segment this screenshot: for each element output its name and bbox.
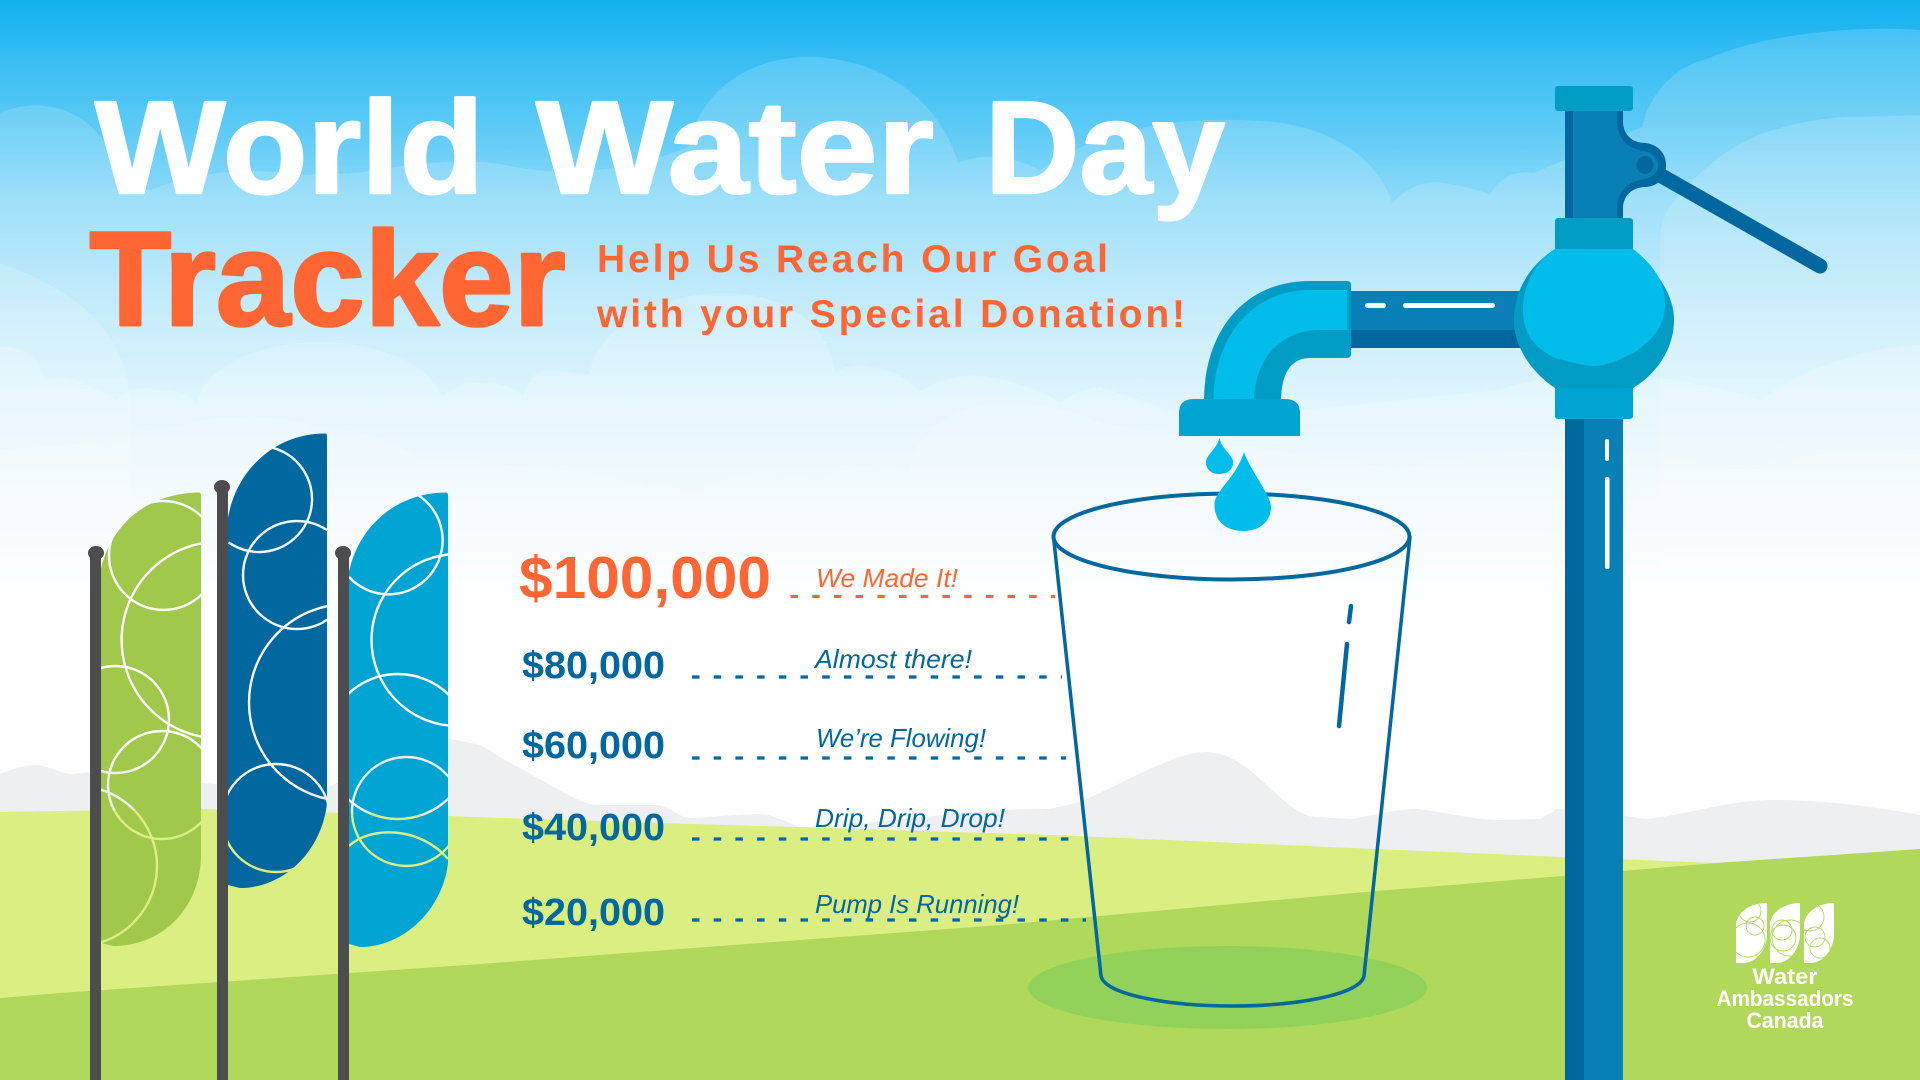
logo text: Canada — [1746, 1008, 1824, 1033]
title: World Water Day: World — [95, 74, 484, 221]
title: Tracker: Tracker — [90, 205, 566, 354]
label: We're Flowing: We’re Flowing! — [816, 723, 986, 753]
cloud layer: upper band — [0, 29, 1920, 620]
milestone labels — [813, 563, 1019, 919]
foreground green field — [0, 849, 1920, 1080]
amount: 20,000: $20,000 — [522, 892, 665, 934]
cloud layer: lower band — [0, 293, 1920, 640]
subtitle line 1: Help Us Reach Our Goal — [597, 238, 1108, 281]
glass highlight short — [1349, 606, 1351, 622]
title: World Water Day: Water — [536, 74, 934, 221]
glass — [1054, 494, 1410, 1006]
glass highlight long — [1339, 644, 1347, 726]
label: Drip Drip Drop: Drip, Drip, Drop! — [815, 803, 1005, 833]
logo: Water Ambassadors Canada — [1716, 900, 1854, 1033]
logo flags — [1731, 900, 1834, 963]
amount: 100,000: $100,000 — [519, 545, 771, 611]
flag pole: navy — [214, 480, 230, 1080]
flag pole: green — [88, 546, 104, 1080]
glass shadow — [1028, 946, 1427, 1029]
pump column — [1565, 415, 1623, 1080]
donation amounts — [519, 545, 771, 934]
water pump — [1179, 86, 1820, 1080]
large water drop — [1214, 452, 1271, 531]
logo text: Ambassadors — [1716, 986, 1854, 1011]
tracker dashed lines — [692, 596, 1086, 920]
elbow pipe — [1204, 281, 1351, 402]
glass body — [1054, 537, 1410, 1006]
lower collar — [1555, 385, 1633, 419]
pivot bolt — [1636, 156, 1654, 174]
logo text: Water — [1752, 964, 1818, 989]
cloud layer: right inner cloud — [1660, 115, 1920, 620]
pump head outer — [1565, 105, 1666, 225]
cloud layer: left large cloud — [0, 263, 130, 620]
horizontal spout pipe — [1345, 291, 1525, 348]
faucet nozzle — [1179, 399, 1300, 436]
pump handle — [1660, 175, 1820, 266]
top cap — [1555, 86, 1633, 111]
cloud layer: faint bottom band — [0, 403, 1920, 640]
label: Almost there: Almost there! — [813, 644, 972, 674]
pale green field — [0, 809, 1920, 1080]
label: We Made It: We Made It! — [816, 563, 958, 593]
flag: green — [101, 492, 201, 946]
amount: 60,000: $60,000 — [522, 725, 665, 767]
flag: navy — [228, 434, 327, 888]
flag pole: blue — [335, 546, 351, 1080]
white lower sky — [0, 600, 1920, 860]
dashes: 100k — [790, 595, 1055, 598]
dashes: 40k — [692, 837, 1077, 841]
subtitle — [596, 238, 1185, 336]
label: Pump Is Running: Pump Is Running! — [815, 889, 1019, 919]
amount: 40,000: $40,000 — [522, 807, 665, 849]
small water drop — [1206, 438, 1233, 474]
title: World Water Day: Day — [985, 74, 1225, 221]
sky background — [0, 0, 1920, 600]
dashes: 20k — [692, 918, 1086, 922]
pump head inner — [1573, 105, 1658, 225]
flags — [88, 434, 448, 1080]
glass rim — [1054, 494, 1410, 580]
upper collar — [1555, 218, 1633, 251]
amount: 80,000: $80,000 — [522, 645, 665, 687]
pump bulb — [1514, 249, 1674, 388]
flag: blue — [349, 492, 448, 947]
dashes: 80k — [692, 675, 1062, 679]
dashes: 60k — [692, 756, 1066, 760]
logo text — [1716, 964, 1854, 1033]
subtitle line 2: with your Special Donation! — [596, 293, 1185, 336]
distant mountains — [0, 738, 1920, 900]
clouds — [0, 29, 1920, 640]
